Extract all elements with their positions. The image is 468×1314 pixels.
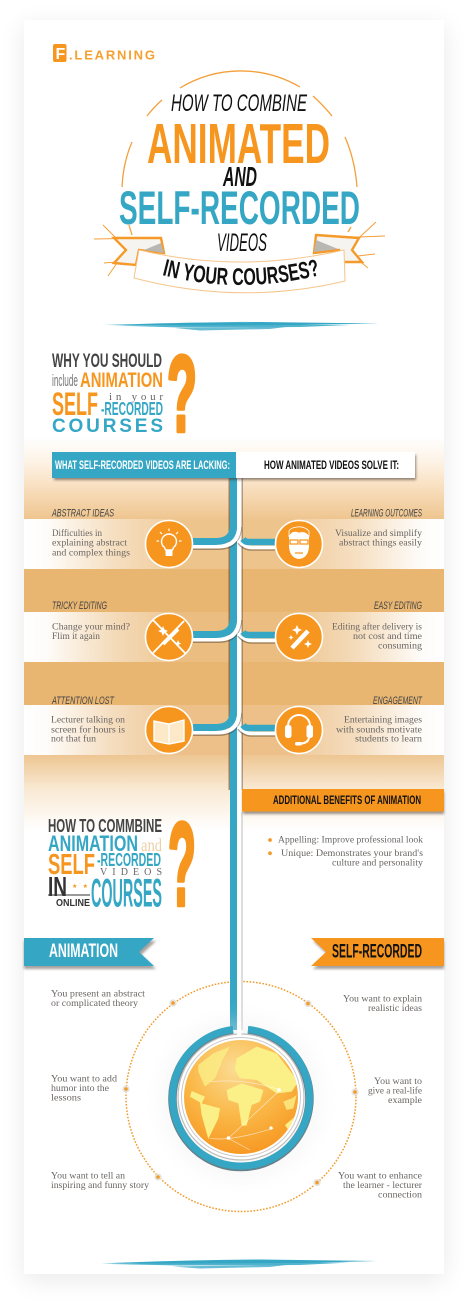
section heading: how to combine: ONLINE <box>56 898 90 909</box>
connector row 3 <box>193 710 275 736</box>
brush stroke divider top <box>104 322 379 330</box>
icon: headset <box>276 706 322 754</box>
section heading: why you should <box>52 333 197 454</box>
title: how to combine: HOW TO COMBINE <box>171 90 308 117</box>
self-recorded use cases: the learner - lecturer <box>343 1180 423 1191</box>
connector row 2 <box>193 617 275 643</box>
brush stroke divider bottom <box>101 1260 377 1268</box>
item left 2: tricky editing <box>52 600 130 642</box>
item left 1: abstract ideas: and complex things <box>52 547 130 558</box>
section heading: why you should: WHY YOU SHOULD <box>52 351 162 372</box>
self-recorded use cases <box>338 994 423 1201</box>
ribbon: self-recorded <box>311 938 444 969</box>
logo: F.LEARNING: .LEARNING <box>69 48 155 62</box>
self-recorded use cases: example <box>388 1095 422 1106</box>
title: and: AND <box>222 161 257 192</box>
self-recorded use cases: You want to enhance <box>338 1171 422 1182</box>
central spine timeline <box>228 478 243 1033</box>
animation use cases <box>51 989 149 1191</box>
header bar: comparison titles: WHAT SELF-RECORDED VIDEOS ARE LACKING: <box>55 458 230 472</box>
self-recorded use cases: give a real-life <box>368 1086 422 1097</box>
animation use cases: You present an abstract <box>51 989 145 1000</box>
item left 2: tricky editing: Change your mind? <box>52 621 130 632</box>
item right 3: engagement: with sounds motivate <box>336 724 422 735</box>
item left 3: attention lost: screen for hours is <box>51 724 125 735</box>
icon: crossed out wand <box>146 614 192 660</box>
icon: geek face <box>276 520 322 568</box>
self-recorded use cases: You want to explain <box>343 994 422 1005</box>
ribbon: animation: ANIMATION <box>49 941 118 962</box>
title: animated: ANIMATED <box>147 112 330 176</box>
item left 1: abstract ideas: explaining abstract <box>52 538 127 549</box>
section heading: why you should: SELF <box>52 386 98 422</box>
animation use cases: lessons <box>51 1093 81 1104</box>
icon: light bulb <box>146 520 192 568</box>
item right 3: engagement: Entertaining images <box>344 715 422 726</box>
item right 1: learning outcomes <box>335 508 422 549</box>
item right 3: engagement: students to learn <box>355 734 422 745</box>
animation use cases: or complicated theory <box>51 998 138 1009</box>
section heading: how to combine: SELF <box>48 849 95 881</box>
item left 1: abstract ideas: Difficulties in <box>52 528 102 539</box>
logo: F.LEARNING: F <box>56 46 66 63</box>
section heading: how to combine: and <box>141 835 162 855</box>
item right 1: learning outcomes: Visualize and simplify <box>335 528 422 539</box>
section heading: how to combine: VIDEOS <box>100 867 162 878</box>
section heading: how to combine: ANIMATION <box>48 831 138 856</box>
ribbon banner: IN YOUR COURSES? <box>163 259 317 286</box>
dotted circle around globe <box>122 982 359 1212</box>
ribbon: animation <box>24 938 156 969</box>
item right 3: engagement: ENGAGEMENT <box>373 695 423 707</box>
animation use cases: You want to tell an <box>51 1171 125 1182</box>
section heading: how to combine: IN <box>48 871 67 902</box>
item right 2: easy editing: Editing after delivery is <box>332 621 422 632</box>
animation use cases: humor into the <box>51 1083 109 1094</box>
item left 2: tricky editing: Flim it again <box>52 631 100 642</box>
benefits list: Appelling: Improve professional look <box>278 835 423 846</box>
item right 2: easy editing: not cost and time <box>353 631 422 642</box>
section heading: why you should: include <box>52 371 78 390</box>
ribbon banner <box>94 222 385 294</box>
animation use cases: You want to add <box>51 1074 117 1085</box>
self-recorded use cases: realistic ideas <box>368 1003 422 1014</box>
item left 1: abstract ideas: ABSTRACT IDEAS <box>51 508 114 520</box>
connector row 1 <box>193 524 275 550</box>
item right 1: learning outcomes: abstract things easily <box>339 538 422 549</box>
section heading: how to combine <box>48 799 196 931</box>
item left 3: attention lost: not that fun <box>51 734 96 745</box>
header bar: comparison titles: HOW ANIMATED VIDEOS SOLVE IT: <box>264 458 399 472</box>
item right 2: easy editing: consuming <box>378 641 422 652</box>
self-recorded use cases: connection <box>378 1190 422 1201</box>
benefits list: culture and personality <box>332 858 423 868</box>
section heading: why you should: ANIMATION <box>80 369 163 392</box>
title badge arcs <box>122 71 357 235</box>
section heading: how to combine: HOW TO COMMBINE <box>48 816 162 836</box>
globe with ring <box>161 1019 321 1179</box>
benefits list <box>268 835 423 868</box>
item right 2: easy editing: EASY EDITING <box>374 600 422 612</box>
icon: magic wand <box>276 614 322 660</box>
section heading: how to combine: ★★ <box>72 883 88 890</box>
item left 3: attention lost: ATTENTION LOST <box>51 695 115 707</box>
section heading: why you should: in your <box>109 391 163 403</box>
icon: open book <box>146 706 192 754</box>
additional benefits bar <box>242 789 444 814</box>
section heading: how to combine: -RECORDED <box>97 850 161 870</box>
logo: F.LEARNING <box>53 44 155 63</box>
text: ? <box>167 333 197 454</box>
title: videos: VIDEOS <box>217 229 267 257</box>
item left 3: attention lost: Lecturer talking on <box>51 715 125 726</box>
item right 2: easy editing <box>332 600 422 652</box>
section heading: how to combine: COURSES <box>91 872 162 916</box>
self-recorded use cases: You want to <box>374 1076 422 1087</box>
item left 1: abstract ideas <box>51 508 130 558</box>
header bar: comparison titles <box>52 452 416 480</box>
text: ? <box>168 799 196 931</box>
item left 2: tricky editing: TRICKY EDITING <box>52 600 107 612</box>
item left 3: attention lost <box>51 695 125 745</box>
section heading: why you should: COURSES <box>52 416 163 437</box>
benefits list: Unique: Demonstrates your brand's <box>281 848 423 859</box>
panel: orange comparison band <box>24 436 444 830</box>
section heading: why you should: -RECORDED <box>101 399 163 419</box>
item right 3: engagement <box>336 695 423 745</box>
animation use cases: inspiring and funny story <box>51 1180 149 1191</box>
